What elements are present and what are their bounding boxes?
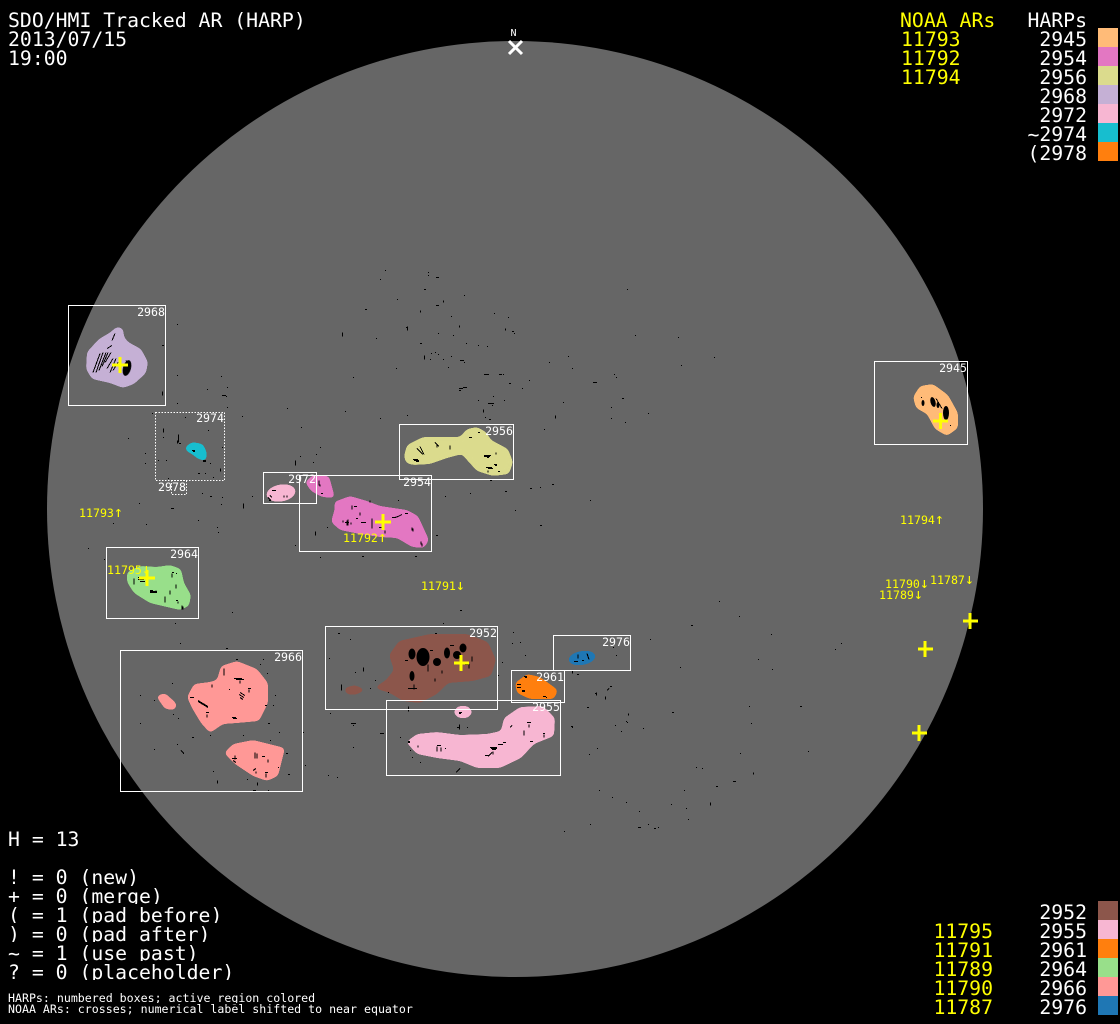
top legend: NOAA ARs and HARPs: (2978 (1027, 142, 1087, 165)
scattered magnetogram speckles (88, 270, 842, 832)
box 2956: 2956 (485, 424, 513, 438)
box 2966: 2966 (274, 650, 302, 664)
box 2961: 2961 (536, 670, 564, 684)
bottom legend: NOAA ARs and HARPs: 11789 (933, 958, 993, 981)
status counts: ? = 0 (placeholder) (8, 961, 234, 984)
NOAA AR labels with arrows (79, 503, 974, 603)
top legend: NOAA ARs and HARPs (900, 9, 1118, 165)
bottom legend: NOAA ARs and HARPs: 11791 (933, 939, 993, 962)
box 2956 (400, 424, 514, 480)
box 2955: 2955 (532, 700, 560, 714)
bottom legend: NOAA ARs and HARPs: 11787 (933, 996, 993, 1019)
box 2945 (874, 361, 968, 444)
top legend: NOAA ARs and HARPs: 11793 (901, 28, 961, 51)
top legend: NOAA ARs and HARPs: 2972 (1039, 104, 1087, 127)
region 2955 (406, 706, 555, 768)
bottom legend: NOAA ARs and HARPs: 2955 (1039, 920, 1087, 943)
top legend: NOAA ARs and HARPs: 2945 (1039, 28, 1087, 51)
status counts: + = 0 (merge) (8, 885, 163, 908)
top legend: NOAA ARs and HARPs: 11794 (901, 66, 961, 89)
region 2972 (265, 482, 297, 504)
bottom legend: NOAA ARs and HARPs: 2966 (1039, 977, 1087, 1000)
box 2976: 2976 (602, 635, 630, 649)
box 2976 (554, 635, 630, 670)
box 2954 (300, 475, 432, 552)
H count: H = 13 (8, 828, 79, 851)
bottom legend: NOAA ARs and HARPs: 11790 (933, 977, 993, 1000)
region 2966 (156, 661, 285, 781)
box 2952: 2952 (469, 626, 497, 640)
NOAA AR labels with arrows: 11793↑ (79, 503, 123, 521)
box 2978: 2978 (158, 480, 186, 494)
bottom legend: NOAA ARs and HARPs: 2976 (1039, 996, 1087, 1019)
box 2966 (120, 650, 302, 792)
title block (8, 9, 306, 70)
box 2955 (386, 700, 560, 776)
bottom legend: NOAA ARs and HARPs (933, 901, 1118, 1019)
north pole marker: N (510, 28, 517, 39)
box 2964 (106, 547, 198, 618)
box 2968 (68, 305, 166, 406)
top legend: NOAA ARs and HARPs: 11792 (901, 47, 961, 70)
bottom legend: NOAA ARs and HARPs: 2964 (1039, 958, 1087, 981)
title block: 19:00 (8, 47, 68, 70)
footnote (0, 991, 420, 1016)
status counts (0, 866, 245, 985)
bottom legend: NOAA ARs and HARPs: 2952 (1039, 901, 1087, 924)
NOAA AR labels with arrows: 11791↓ (421, 576, 465, 594)
status counts: ~ = 1 (use past) (8, 942, 199, 965)
NOAA AR labels with arrows: 11792↑ (343, 528, 387, 546)
box 2954: 2954 (403, 475, 431, 489)
top legend: NOAA ARs and HARPs: 2968 (1039, 85, 1087, 108)
box 2972 (264, 472, 316, 504)
region 2964 (127, 565, 191, 610)
sunspots inside regions (93, 334, 951, 778)
top legend: NOAA ARs and HARPs: 2956 (1039, 66, 1087, 89)
region 2952 (344, 634, 496, 703)
top legend: NOAA ARs and HARPs: ~2974 (1027, 123, 1087, 146)
bottom legend: NOAA ARs and HARPs: 11795 (933, 920, 993, 943)
region 2961 (515, 674, 558, 699)
NOAA AR labels with arrows: 11794↑ (900, 510, 944, 528)
region 2945 (913, 384, 958, 436)
region 2954 (305, 475, 429, 548)
box 2968: 2968 (137, 305, 165, 319)
NOAA AR labels with arrows: 11787↓ (930, 570, 974, 588)
title block: 2013/07/15 (8, 28, 127, 51)
region 2956 (404, 427, 513, 476)
top legend: NOAA ARs and HARPs: HARPs (1027, 9, 1087, 32)
NOAA AR labels with arrows: 11790↓ (885, 574, 929, 592)
bottom legend: NOAA ARs and HARPs: 2961 (1039, 939, 1087, 962)
NOAA AR labels with arrows: 11795↓ (107, 560, 151, 578)
box 2961 (512, 670, 564, 702)
region 2974 (185, 442, 207, 461)
title block: SDO/HMI Tracked AR (HARP) (8, 9, 306, 32)
status counts: ) = 0 (pad after) (8, 923, 210, 946)
north pole marker (509, 28, 522, 54)
region 2968 (86, 327, 148, 388)
box 2964: 2964 (170, 547, 198, 561)
footnote: NOAA ARs: crosses; numerical label shifted to near equator (8, 1002, 413, 1016)
NOAA AR crosses (112, 357, 978, 741)
solar disk (47, 41, 983, 977)
box 2974 (156, 411, 224, 480)
sunspot umbrae (121, 359, 949, 681)
top legend: NOAA ARs and HARPs: NOAA ARs (900, 9, 995, 32)
box 2945: 2945 (939, 361, 967, 375)
box 2952 (326, 626, 498, 710)
NOAA AR labels with arrows: 11789↓ (879, 585, 923, 603)
active regions colored (86, 327, 958, 781)
region 2976 (567, 649, 597, 667)
sunspot fine structure (93, 334, 951, 778)
box 2972: 2972 (288, 472, 316, 486)
footnote: HARPs: numbered boxes; active region colored (8, 991, 315, 1005)
status counts: ( = 1 (pad before) (8, 904, 222, 927)
top legend: NOAA ARs and HARPs: 2954 (1039, 47, 1087, 70)
box 2974: 2974 (196, 411, 224, 425)
status counts: ! = 0 (new) (8, 866, 139, 889)
HARP boxes (68, 305, 968, 792)
